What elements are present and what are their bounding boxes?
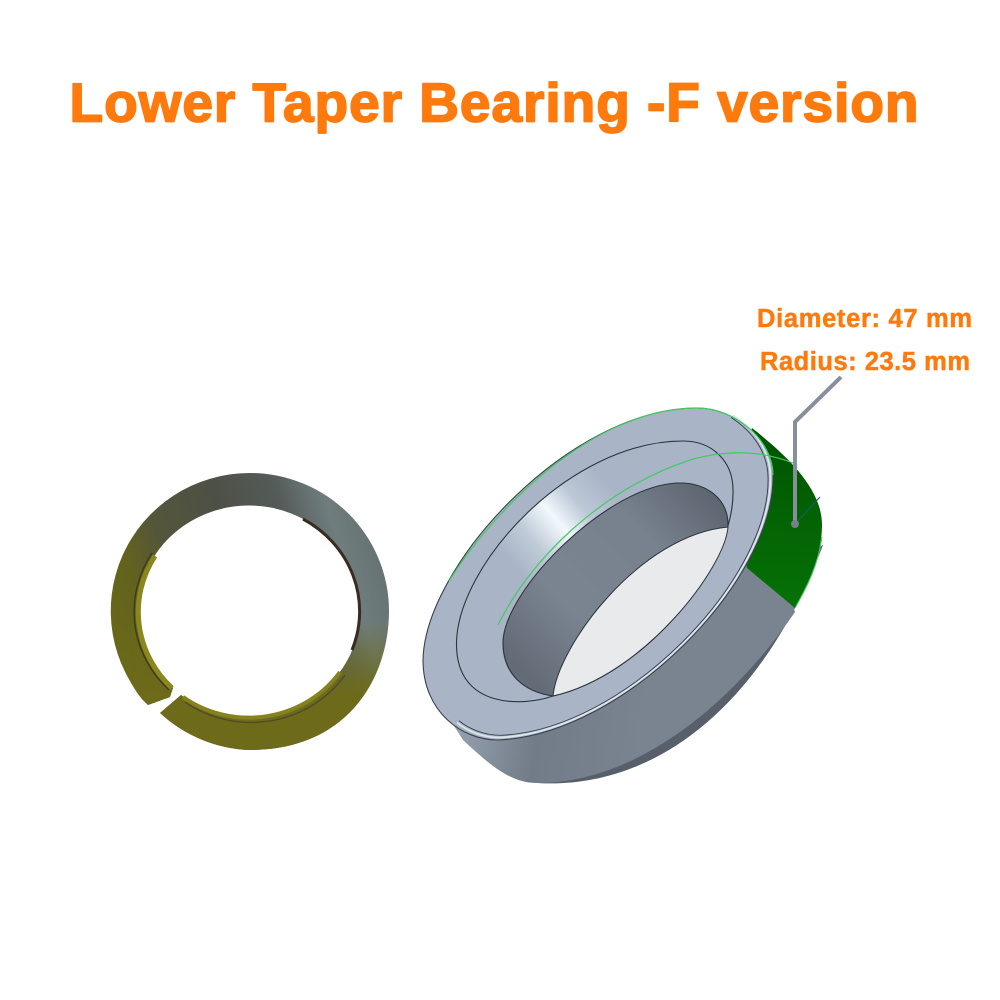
bore wall (503, 483, 728, 696)
dimension label: diameter: Diameter: 47 mm (757, 305, 972, 333)
green highlighted surface (735, 428, 822, 608)
front face (423, 408, 773, 740)
title: Lower Taper Bearing -F version (70, 72, 918, 134)
see-through hole (553, 527, 728, 696)
ring: bottom inner olive lip (183, 672, 340, 718)
photo: split bearing ring (111, 473, 389, 750)
body outer wall (445, 500, 795, 783)
front face chamfer highlight (457, 415, 770, 737)
rear rim (537, 545, 823, 783)
dimension label: radius: Radius: 23.5 mm (760, 348, 970, 376)
CAD model: taper bearing (423, 408, 823, 783)
ring: bottom inner dark line (185, 675, 345, 722)
ring: olive lower band (112, 600, 389, 750)
leader line (791, 377, 841, 528)
green edge highlight: right (795, 537, 822, 608)
front face chamfer dark line (459, 417, 768, 735)
taper surface (456, 441, 733, 702)
ring: right inner dark lip (303, 519, 360, 650)
ring: left inner olive lip (138, 556, 172, 688)
green edge highlight: inner arc (498, 453, 793, 625)
green edge highlight: outer (449, 408, 773, 581)
ring: left inner dark line (134, 553, 169, 690)
